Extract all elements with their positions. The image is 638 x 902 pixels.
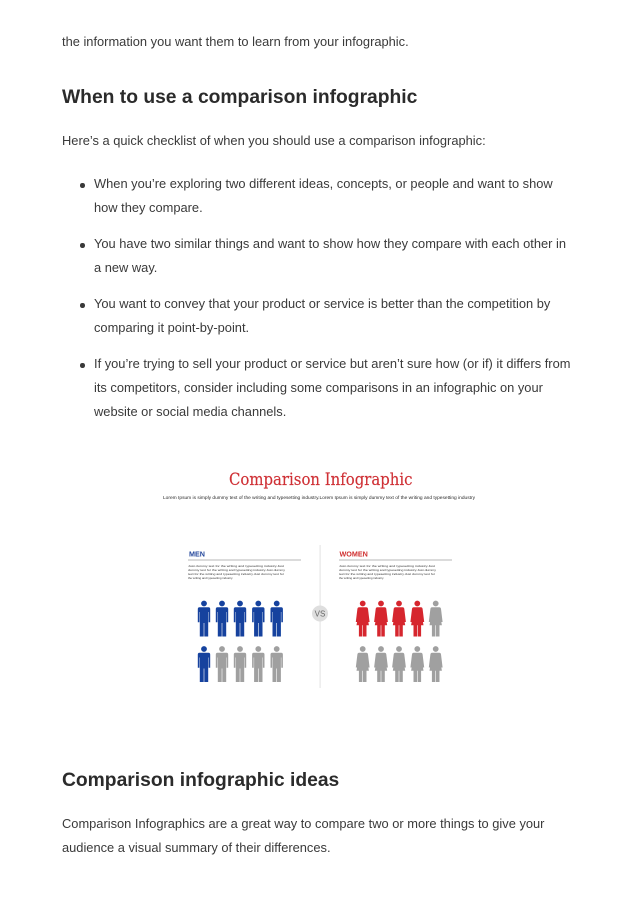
men description: dummy text for the writing and typesetting industry.Just dummy — [188, 568, 286, 572]
item 3 line 1: You want to convey that your product or service is better than the competition by — [94, 296, 550, 311]
item 2 line 1: You have two similar things and want to show how they compare with each other in — [94, 236, 566, 251]
text: carried-over line: the information you want them to learn from your infographic. — [62, 34, 409, 49]
item 4 line 2: its competitors, consider including some comparisons in an infographic on your — [94, 380, 543, 395]
text: ideas line 1: Comparison Infographics are a great way to compare two or more things to give your — [62, 816, 544, 831]
bullet 1 — [80, 183, 84, 188]
text: ideas line 2: audience a visual summary of their differences. — [62, 840, 331, 855]
bullet 4 — [80, 363, 84, 368]
VS badge: VS — [315, 610, 325, 618]
item 1 line 2: how they compare. — [94, 200, 203, 215]
panel: men — [188, 550, 301, 682]
women pictogram row 1 — [356, 601, 443, 636]
women description: the writing and typesetting industry. — [339, 576, 384, 580]
item 4 line 1: If you’re trying to sell your product or service but aren’t sure how (or if) it differs from — [94, 356, 570, 371]
women rule — [339, 559, 452, 561]
centre divider — [320, 545, 321, 688]
item 3 line 2: comparing it point-by-point. — [94, 320, 249, 335]
heading: when to use: When to use a comparison infographic — [62, 87, 417, 108]
men pictogram row 2 — [198, 646, 283, 682]
women description: text for the writing and typesetting industry.Just dummy text for — [339, 572, 435, 576]
men heading: MEN — [189, 550, 205, 558]
bullet 3 — [80, 303, 84, 308]
list: checklist — [80, 176, 570, 419]
heading: ideas: Comparison infographic ideas — [62, 770, 339, 791]
infographic subtitle: Lorem Ipsum is simply dummy text of the writing and typesetting industry.Lorem Ipsum is simply dummy text of the writing and typesetting industry — [163, 495, 476, 500]
men pictogram row 1 — [198, 601, 283, 636]
women pictogram row 2 — [356, 646, 443, 682]
text: checklist intro: Here’s a quick checklist of when you should use a comparison infographic: — [62, 133, 486, 148]
bullet 2 — [80, 243, 84, 248]
item 2 line 2: a new way. — [94, 260, 157, 275]
item 1 line 1: When you’re exploring two different ideas, concepts, or people and want to show — [94, 176, 553, 191]
panel: women — [339, 550, 452, 682]
item 4 line 3: website or social media channels. — [94, 404, 286, 419]
men description: text for the writing and typesetting industry.Just dummy text for — [188, 572, 284, 576]
infographic title: Comparison Infographic — [229, 470, 412, 489]
men description: Just dummy text for the writing and typesetting industry.Just — [188, 564, 284, 568]
women description: Just dummy text for the writing and typesetting industry.Just — [339, 564, 435, 568]
men rule — [188, 559, 301, 561]
VS badge — [312, 606, 328, 622]
men description: the writing and typesetting industry. — [188, 576, 233, 580]
women description: dummy text for the writing and typesetting industry.Just dummy — [339, 568, 437, 572]
women heading: WOMEN — [340, 550, 368, 558]
